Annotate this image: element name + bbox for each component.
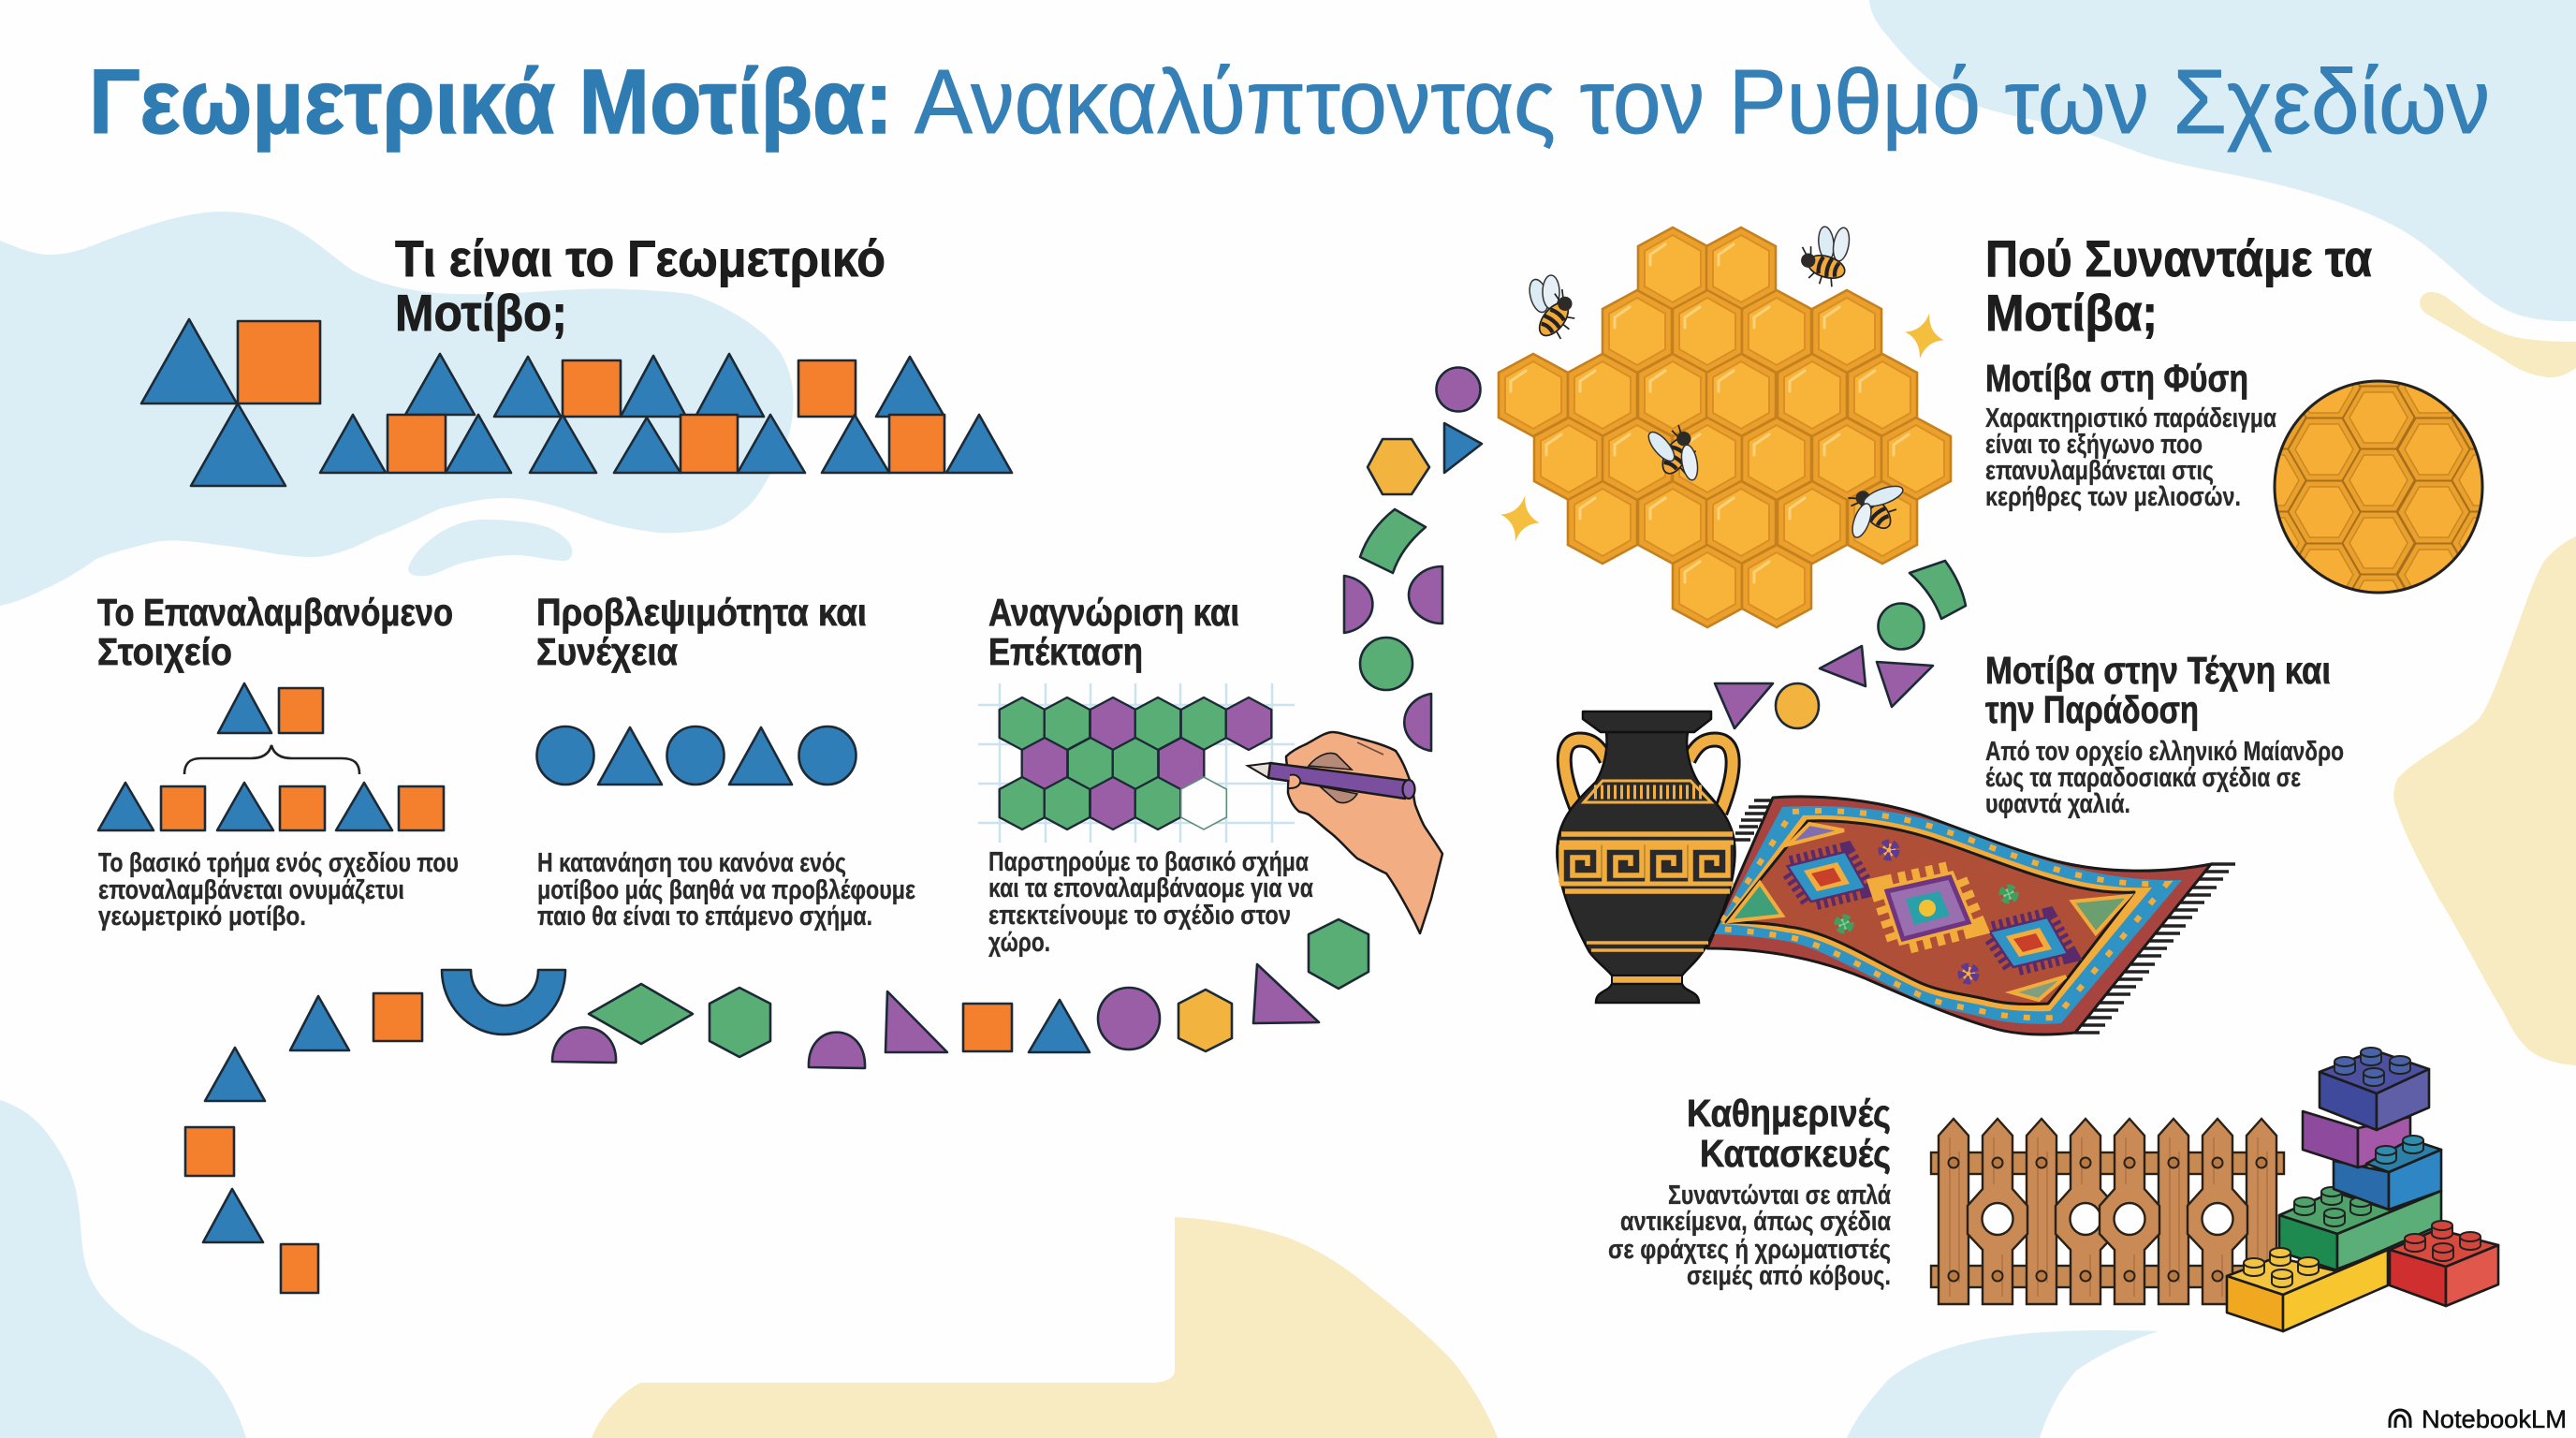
purple brick [2303,1111,2410,1167]
red brick [2390,1221,2498,1306]
icon: hand drawing with pencil [1248,732,1442,933]
text: predictability description [537,848,915,932]
text: predictability description: Η κατανάηση του κανόνα ενός [537,848,846,878]
heading: everyday constructions: Κατασκευές [1700,1132,1891,1175]
title: Γεωμετρικά Μοτίβα: [89,51,893,153]
text: nature description [1985,404,2276,512]
heading: what is a geometric pattern: Τι είναι το Γεωμετρικό [395,229,886,287]
illustration: greek amphora vase [1557,712,1734,1003]
text: nature description: Χαρακτηριστικό παράδειγμα [1985,404,2276,433]
heading: art and tradition [1985,649,2331,731]
title: Ανακαλύπτοντας τον Ρυθμό των Σχεδίων [915,51,2490,153]
panel: predictability [536,591,915,932]
text: extension description [988,847,1313,958]
text: everyday description: σειμές από κόβους. [1687,1261,1891,1291]
heading: art and tradition: την Παράδοση [1985,688,2199,731]
heading: recognition and extension [988,591,1239,673]
panel: art and tradition text [1985,649,2344,819]
text: everyday description: Συναντώνται σε απλά [1668,1181,1891,1211]
illustration: triangles and squares pattern [141,319,1012,486]
heading: predictability: Συνέχεια [536,630,678,673]
text: art description: υφαντά χαλιά. [1985,789,2130,819]
illustration: wooden fence [1931,1119,2284,1304]
text: extension description: Παρστηρούμε το βασικό σχήμα [988,847,1309,877]
blue brick [2334,1150,2441,1210]
heading: everyday constructions [1687,1092,1891,1175]
title [89,51,2490,153]
panel: recognition and extension [978,591,1442,958]
chart: hexagon tessellation on grid [978,683,1295,843]
heading: art and tradition: Μοτίβα στην Τέχνη και [1985,649,2331,692]
icon: repeating unit with brace [98,683,444,830]
heading: everyday constructions: Καθημερινές [1687,1092,1891,1135]
text: nature description: επανυλαμβάνεται στις [1985,456,2214,486]
heading: predictability: Προβλεψιμότητα και [536,591,867,634]
heading: nature: Μοτίβα στη Φύση [1985,357,2248,400]
indigo brick [2320,1048,2429,1130]
yellow brick [2227,1248,2388,1331]
illustration: woven carpet [1707,797,2235,1034]
text: repeating element description: γεωμετρικό μοτίβο. [98,902,306,932]
heading: where we find patterns: Πού Συναντάμε τα [1985,229,2372,287]
text: everyday description: σε φράχτες ή χρωματιστές [1608,1235,1891,1265]
panel: repeating element [97,591,459,932]
text: extension description: και τα εποναλαμβάναομε για να [988,873,1313,903]
text: repeating element description: εποναλαμβάνεται ονυμάζετυι [98,875,404,905]
heading: repeating element: Στοιχείο [97,630,232,673]
heading: recognition and extension: Αναγνώριση και [988,591,1239,634]
heading: what is a geometric pattern: Μοτίβο; [395,284,567,342]
text: repeating element description: Το βασικό τρήμα ενός σχεδίου που [98,848,459,878]
panel: everyday constructions text [1608,1092,1891,1291]
text: extension description: χώρο. [988,928,1050,958]
heading: what is a geometric pattern [395,229,886,342]
heading: where we find patterns [1985,229,2372,342]
arrow: trail of shapes leading to examples [185,367,1966,1293]
text: predictability description: παιο θα είναι το επάμενο σχήμα. [537,902,872,932]
heading: recognition and extension: Επέκταση [988,630,1143,673]
illustration: colourful building bricks [2227,1048,2498,1331]
icon: honeycomb circle [2273,380,2484,594]
icon: circle triangle sequence [537,726,856,785]
illustration: honeycomb with bees [1496,226,1951,627]
green brick [2279,1187,2441,1270]
text: art description: έως τα παραδοσιακά σχέδια σε [1985,763,2301,793]
honeycomb cells [1499,227,1951,627]
icon: bees [1527,226,1905,540]
logo: NotebookLM: NotebookLM [2422,1405,2567,1433]
text: nature description: κερήθρες των μελιοσών. [1985,482,2241,512]
blue brick top [2366,1136,2441,1172]
text: art description: Από τον ορχείο ελληνικό Μαίανδρο [1985,737,2344,767]
heading: repeating element [97,591,453,673]
text: extension description: επεκτείνουμε το σχέδιο στον [988,901,1291,931]
icon: sparkles [1496,309,1949,546]
heading: repeating element: Το Επαναλαμβανόμενο [97,591,453,634]
text: nature description: είναι το εξήγωνο ποο [1985,430,2203,460]
text: everyday description [1608,1181,1891,1291]
text: art description [1985,737,2344,819]
panel: patterns in nature [1985,363,2484,594]
heading: where we find patterns: Μοτίβα; [1985,284,2158,342]
text: everyday description: αντικείμενα, άπως σχέδια [1620,1207,1891,1237]
text: repeating element description [98,848,459,932]
text: predictability description: μοτίβοο μάς βαηθά να προβλέφουμε [537,875,915,905]
heading: predictability [536,591,867,673]
